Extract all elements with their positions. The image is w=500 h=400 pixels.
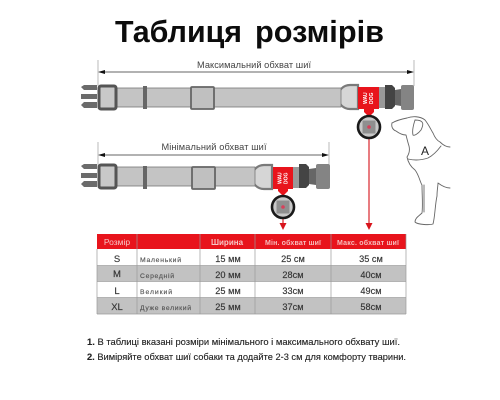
row M: M [113,269,121,280]
row L: Великий [140,288,172,296]
row XL: 58см [360,302,382,312]
table header: Розмір [104,237,130,247]
row S: S [114,254,120,265]
collar: maximum size: DOG [369,92,375,104]
row XL [111,302,382,313]
dimension: maximum neck girth: Максимальний обхват шиї [197,60,311,70]
row S [114,254,383,265]
table header: Макс. обхват шиї [337,239,400,247]
tag: minimum collar [272,196,294,218]
collar: minimum size: WAU [278,172,284,184]
row S: 15 мм [215,254,241,264]
collar: minimum size: DOG [284,172,290,184]
row M: Середній [140,272,174,280]
row L: 25 мм [215,286,241,296]
row S: 25 см [281,254,305,264]
collar: maximum size [81,85,414,117]
row M: 28см [282,270,304,280]
row M: 40см [360,270,382,280]
row L: 49см [360,286,382,296]
tag: maximum collar [358,116,380,138]
row L [114,286,382,297]
row XL: 37см [282,302,304,312]
table header: Ширина [211,238,244,247]
collar: maximum size: WAU [363,92,369,104]
row XL: Дуже великий [140,304,191,312]
row L: L [114,286,120,297]
icon: dog with neck measurement A [392,117,450,225]
row XL: XL [111,302,123,313]
title: розмірів [255,14,384,49]
row backgrounds [97,234,406,314]
row S: Маленький [140,256,181,264]
row XL: 25 мм [215,302,241,312]
collar: minimum size [81,164,330,196]
red arrow from maximum collar [366,130,372,230]
red arrow from minimum collar [280,210,286,230]
title: Таблиця [115,14,242,49]
size table [97,234,406,314]
note 2: 2. Виміряйте обхват шиї собаки та додайте 2-3 см для комфорту тварини. [87,352,406,362]
row M: 20 мм [215,270,241,280]
dimension: maximum neck girth [98,60,414,86]
dimension: minimum neck girth: Мінімальний обхват шиї [162,142,267,152]
title [115,14,384,49]
table header [97,234,406,249]
row L: 33см [282,286,304,296]
icon: dog with neck measurement A: A [421,144,429,158]
dimension: minimum neck girth [98,142,329,167]
table header: Мін. обхват шиї [265,239,322,247]
row S: 35 см [359,254,383,264]
note 1: 1. В таблиці вказані розміри мінімального і максимального обхвату шиї. [87,337,400,347]
row M [113,269,382,280]
